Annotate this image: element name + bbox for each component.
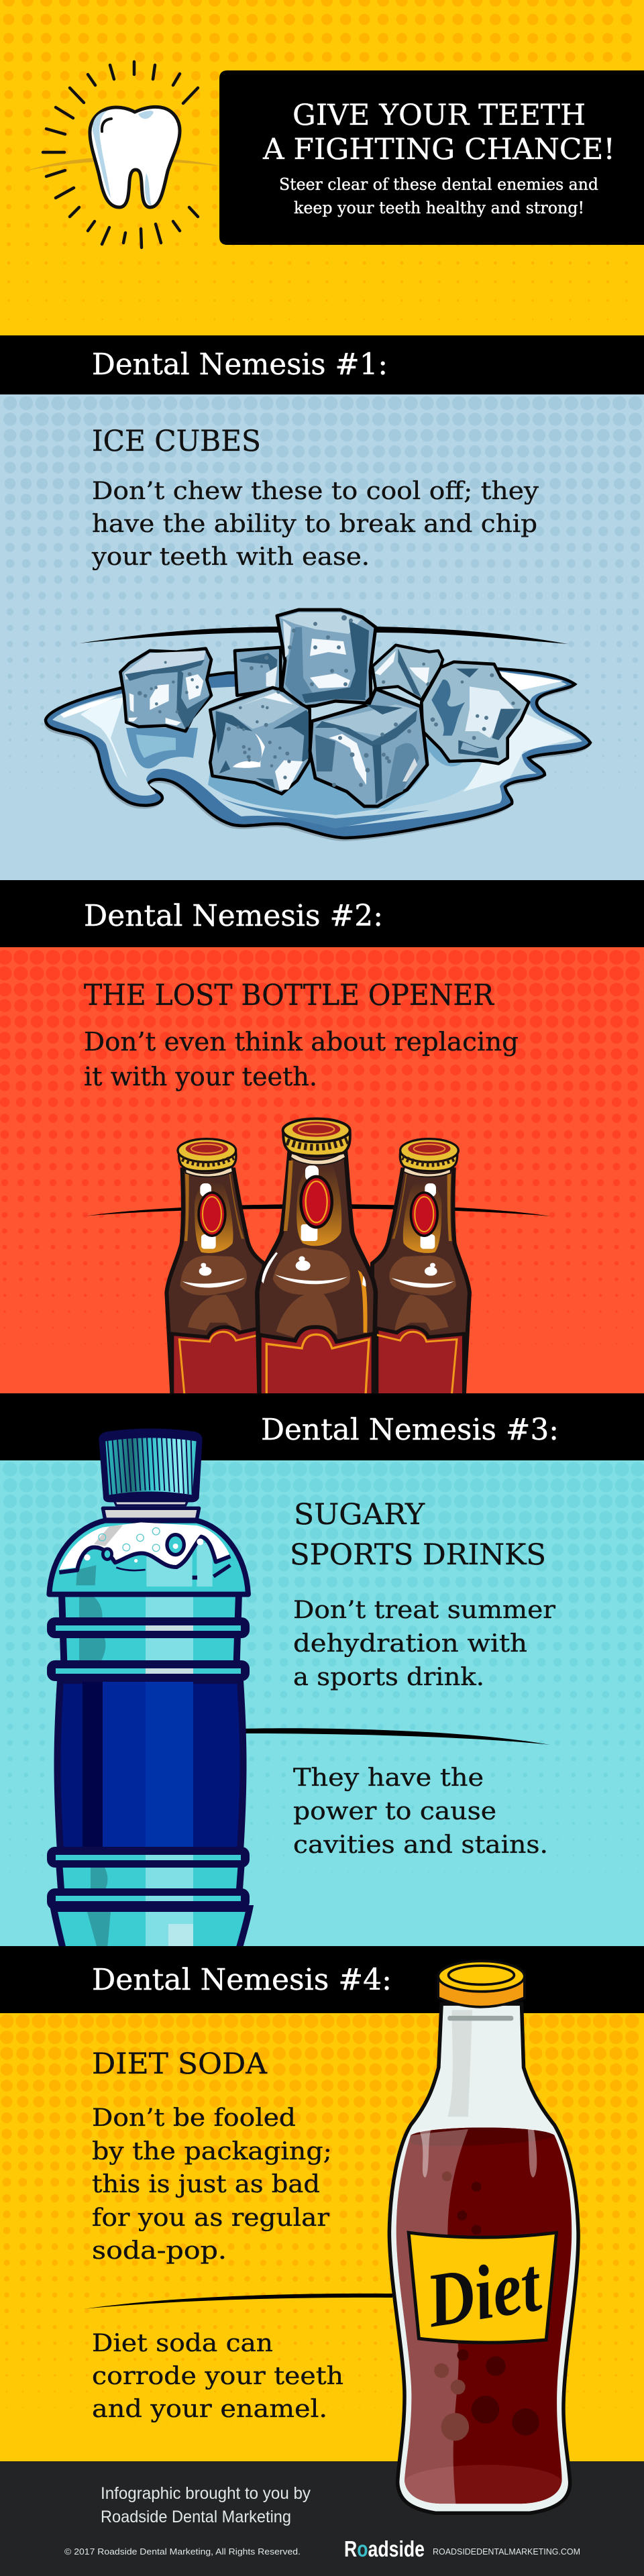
section header: nemesis 3: Dental Nemesis #3: [261,1413,559,1447]
text: diet soda first paragraph: soda-pop. [92,2237,227,2265]
footer [0,2461,644,2576]
text: ice cubes description: Don’t chew these to cool off; they [92,478,539,505]
bottle: right [372,1139,470,1397]
text: ice cubes description [91,478,539,571]
text: diet soda first paragraph: this is just as bad [92,2171,320,2198]
heading: give your teeth: GIVE YOUR TEETH [292,99,586,132]
text: credit line: Roadside Dental Marketing [101,2508,291,2526]
text: credit line [101,2484,311,2526]
section header: nemesis 4 [0,1946,644,2013]
text: sports drinks first paragraph: dehydration with [293,1630,527,1658]
section header: nemesis 4: Dental Nemesis #4: [92,1963,392,1997]
panel: nemesis 3 sports drinks [0,1428,644,1952]
text: website: ROADSIDEDENTALMARKETING.COM [433,2547,580,2557]
text: diet soda second paragraph [92,2330,343,2423]
illustration: sports drink bottle [47,1428,250,1952]
text: diet soda second paragraph: Diet soda can [92,2330,273,2357]
heading: sugary sports drinks: SPORTS DRINKS [290,1538,546,1572]
blue label [58,1680,243,1851]
section header: nemesis 2: Dental Nemesis #2: [84,899,383,933]
panel: nemesis 4 diet soda [0,1961,644,2513]
text: sports drinks second paragraph [293,1764,548,1859]
section header: nemesis 2 [0,880,644,947]
heading: diet soda: DIET SODA [92,2047,268,2081]
heading: ice cubes: ICE CUBES [92,425,261,458]
text: diet soda first paragraph: for you as regular [92,2204,330,2232]
lower body [54,1909,250,1952]
text: ice cubes description: have the ability to break and chip [92,511,537,538]
text: credit line: Infographic brought to you by [101,2484,311,2503]
heading: sugary sports drinks [290,1498,546,1572]
text: bottle opener description: it with your teeth. [84,1062,317,1091]
text: diet soda first paragraph: Don’t be fooled [92,2104,296,2132]
divider swoosh [240,1728,550,1745]
cube: back right [372,645,443,700]
cap [438,1977,525,2007]
text: sports drinks first paragraph: Don’t treat summer [293,1597,556,1624]
glass bottle [389,2004,578,2513]
logo: roadside: Roadside [344,2536,425,2561]
text: bottle opener description: Don’t even think about replacing [84,1027,519,1057]
text: bottle opener description [84,1027,519,1091]
text: sports drinks first paragraph [293,1597,556,1691]
label [409,2233,557,2343]
bubbles [457,2182,539,2436]
cube: front right [310,689,427,806]
panel: nemesis 1 ice cubes [0,394,644,880]
divider swoosh [84,2294,392,2309]
text: sports drinks second paragraph: They have the [293,1764,484,1792]
text: sports drinks second paragraph: cavities and stains. [293,1831,548,1859]
cube: front left [210,688,310,794]
section header: nemesis 1: Dental Nemesis #1: [92,347,388,382]
text: ice cubes description: your teeth with ease. [91,543,370,571]
heading: give your teeth [262,99,615,217]
text: diet soda first paragraph: by the packaging; [92,2138,332,2165]
panel: nemesis 2 bottle opener [0,947,644,1397]
heading: sugary sports drinks: SUGARY [294,1498,425,1532]
heading: give your teeth: keep your teeth healthy and strong! [294,199,584,217]
text: diet soda second paragraph: and your enamel. [92,2396,327,2423]
section header: nemesis 3 [0,1393,644,1460]
cube: right [421,662,529,763]
reflection [396,2129,468,2505]
cube: top center [277,610,376,708]
cube: left small [120,649,211,731]
bottle: center [257,1119,376,1397]
text: sports drinks second paragraph: power to cause [293,1798,496,1825]
upper section [62,1593,239,1677]
bottle: left [166,1139,264,1397]
dome, neck and cap [49,1428,248,1595]
section header: nemesis 1 [0,335,644,394]
illustration: three beer bottles [84,1119,550,1397]
title card [219,70,644,245]
heading: the lost bottle opener: THE LOST BOTTLE OPENER [84,979,495,1012]
ribs [47,1617,250,1910]
cube: back middle [235,647,280,696]
icon: tooth with rays [25,62,221,248]
heading: give your teeth: A FIGHTING CHANCE! [262,133,615,166]
text: copyright: © 2017 Roadside Dental Marketing, All Rights Reserved. [64,2546,301,2557]
middle section [59,1862,241,1898]
heading: give your teeth: Steer clear of these dental enemies and [279,175,598,194]
text: diet on label: Diet [421,2241,547,2343]
text: diet soda first paragraph [92,2104,332,2265]
panel: intro yellow background [0,0,644,335]
illustration: melting ice cubes [44,610,590,841]
illustration: diet soda bottle [389,1961,578,2513]
text: diet soda second paragraph: corrode your teeth [92,2363,343,2390]
text: sports drinks first paragraph: a sports drink. [293,1664,484,1691]
soda [396,2128,572,2504]
